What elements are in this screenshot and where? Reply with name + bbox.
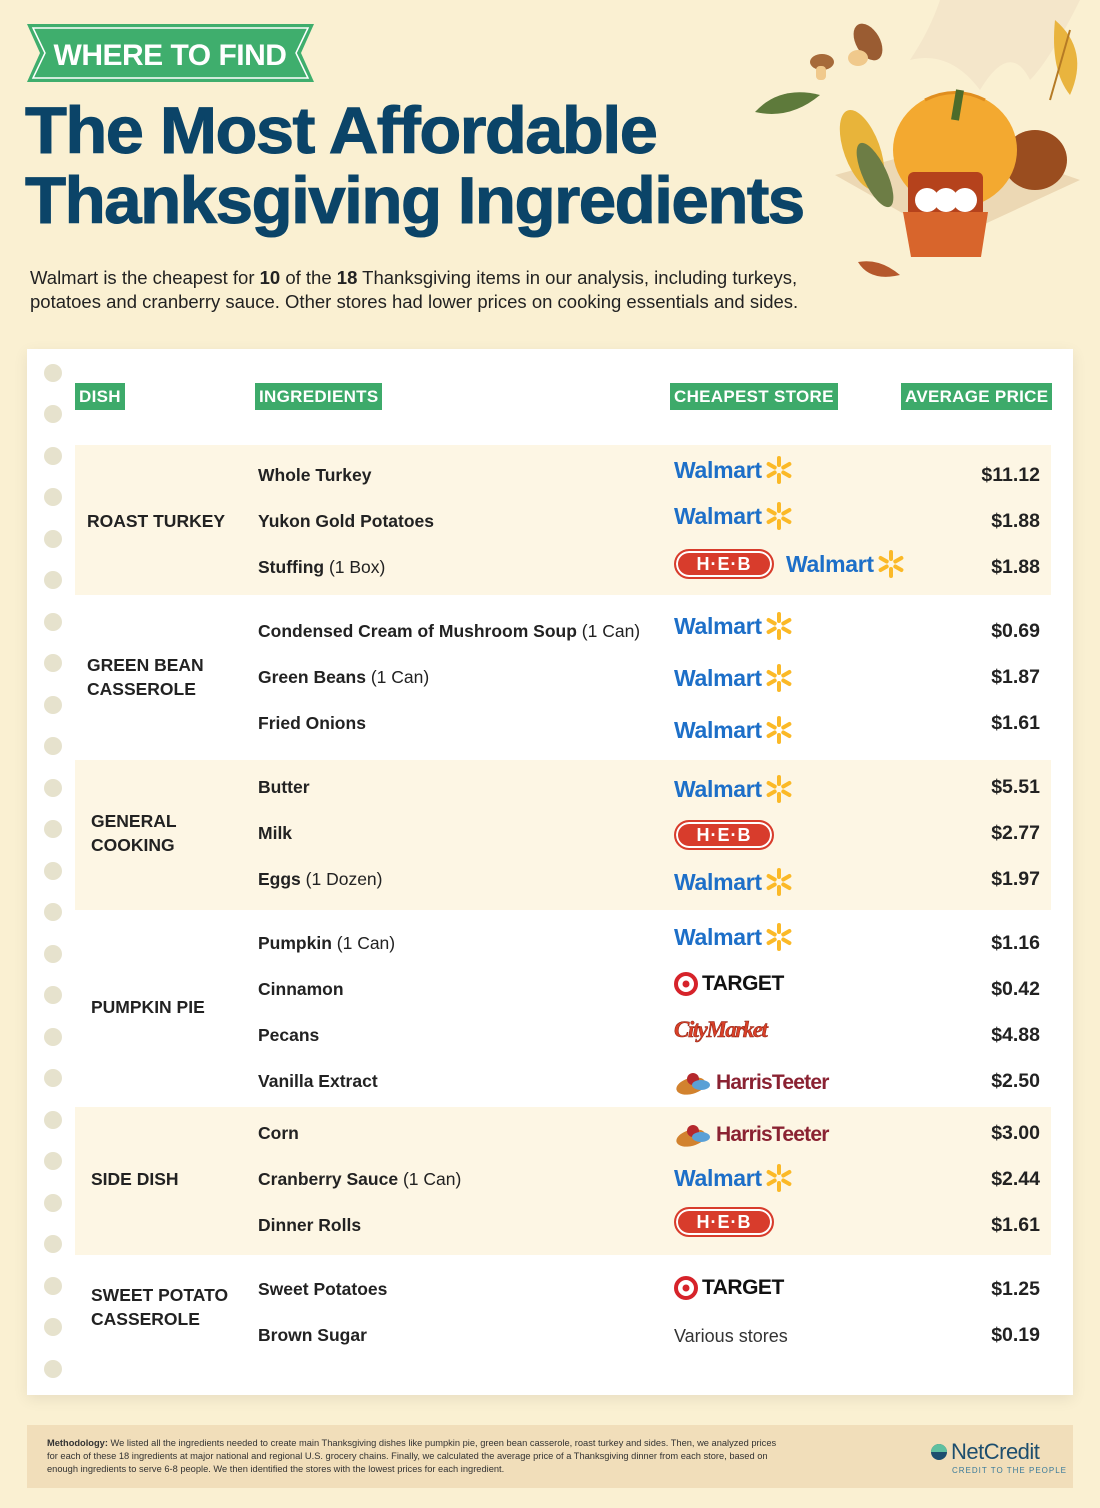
text: $2.50 xyxy=(991,1070,1040,1092)
header: dish: DISH xyxy=(79,387,121,406)
header: cheapest store: CHEAPEST STORE xyxy=(674,387,834,406)
store logos xyxy=(674,456,792,484)
dish: pumpkin pie: PUMPKIN PIE xyxy=(91,997,205,1017)
dish: sweet potato casserole xyxy=(91,1285,228,1329)
illustration: thanksgiving food xyxy=(755,0,1080,277)
text: Walmart xyxy=(674,612,762,638)
dish: sweet potato casserole: CASSEROLE xyxy=(91,1309,200,1329)
text: $1.87 xyxy=(991,666,1040,688)
text: CityMarket xyxy=(674,1017,766,1042)
text: $2.44 xyxy=(991,1168,1040,1190)
text: Dinner Rolls xyxy=(258,1215,361,1235)
text: Pumpkin (1 Can) xyxy=(258,933,395,953)
banner: where to find xyxy=(27,24,314,82)
text: Walmart xyxy=(674,716,762,742)
header: dish xyxy=(75,383,125,410)
text: HarrisTeeter xyxy=(716,1123,829,1146)
text: Walmart xyxy=(674,776,762,802)
header: cheapest store xyxy=(670,383,838,410)
text: Walmart xyxy=(674,924,762,950)
text: TARGET xyxy=(702,972,784,995)
text: Walmart xyxy=(786,550,874,576)
dish: side dish: SIDE DISH xyxy=(91,1169,179,1189)
text: $1.61 xyxy=(991,712,1040,734)
banner: where to find: WHERE TO FIND xyxy=(54,39,286,72)
title: The Most Affordable xyxy=(25,93,656,167)
text: Butter xyxy=(258,777,310,797)
text: Cinnamon xyxy=(258,979,344,999)
text: TARGET xyxy=(702,1276,784,1299)
text: $1.61 xyxy=(991,1214,1040,1236)
title xyxy=(25,93,804,238)
dish: green bean casserole: CASSEROLE xyxy=(87,679,196,699)
text: $0.19 xyxy=(991,1324,1040,1346)
text: $1.97 xyxy=(991,868,1040,890)
ingredients: Whole Turkey xyxy=(258,465,371,485)
text: Walmart xyxy=(674,502,762,528)
intro text: Walmart is the cheapest for 10 of the 18 Thanksgiving items in our analysis, including turkeys, potatoes and cranberry sauce. Other stores had lower prices on cooking essentials and sides. xyxy=(30,267,798,312)
title: Thanksgiving Ingredients xyxy=(25,163,804,237)
text: Yukon Gold Potatoes xyxy=(258,511,434,531)
text: Brown Sugar xyxy=(258,1325,367,1345)
dish: green bean casserole: GREEN BEAN xyxy=(87,655,204,675)
prices: $11.12 xyxy=(981,464,1040,486)
header: ingredients: INGREDIENTS xyxy=(259,387,378,406)
text: $3.00 xyxy=(991,1122,1040,1144)
logo: NetCredit: CREDIT TO THE PEOPLE xyxy=(952,1466,1067,1475)
text: Fried Onions xyxy=(258,713,366,733)
dish: sweet potato casserole: SWEET POTATO xyxy=(91,1285,228,1305)
panel: table card xyxy=(27,349,1073,1395)
text: Walmart xyxy=(674,1164,762,1190)
text: Vanilla Extract xyxy=(258,1071,378,1091)
dish: general cooking: COOKING xyxy=(91,835,175,855)
methodology footer xyxy=(27,1425,1073,1488)
header: average price: AVERAGE PRICE xyxy=(905,387,1048,406)
logo: NetCredit: NetCredit xyxy=(951,1439,1039,1464)
text: Condensed Cream of Mushroom Soup (1 Can) xyxy=(258,621,640,641)
dish: green bean casserole xyxy=(87,655,204,699)
text: Eggs (1 Dozen) xyxy=(258,869,382,889)
header: ingredients xyxy=(255,383,382,410)
text: H·E·B xyxy=(696,825,752,845)
text: Cranberry Sauce (1 Can) xyxy=(258,1169,461,1189)
methodology footer: Methodology: We listed all the ingredients needed to create main Thanksgiving dishes like pumpkin pie, green bean casserole, roast turkey and sides. Then, we analyzed prices for each of these 18 ingredients at major national and regional U.S. grocery chains. Finally, we calculated the average price of a Thanksgiving dinner from each store, based on enough ingredients to serve 6-8 people. We then identified the stores with the lowest prices for each ingredient. xyxy=(47,1438,776,1474)
text: Walmart xyxy=(674,664,762,690)
header: average price xyxy=(901,383,1052,410)
text: Corn xyxy=(258,1123,299,1143)
text: $1.16 xyxy=(991,932,1040,954)
text: Pecans xyxy=(258,1025,319,1045)
dish: general cooking xyxy=(91,811,177,855)
text: H·E·B xyxy=(696,554,752,574)
logo: NetCredit xyxy=(931,1439,1067,1475)
text: $0.42 xyxy=(991,978,1040,1000)
text: $1.88 xyxy=(991,556,1040,578)
text: $2.77 xyxy=(991,822,1040,844)
text: Various stores xyxy=(674,1326,788,1346)
dish: roast turkey: ROAST TURKEY xyxy=(87,511,225,531)
text: $1.25 xyxy=(991,1278,1040,1300)
text: Stuffing (1 Box) xyxy=(258,557,385,577)
text: Sweet Potatoes xyxy=(258,1279,387,1299)
text: $4.88 xyxy=(991,1024,1040,1046)
text: HarrisTeeter xyxy=(716,1071,829,1094)
text: Walmart xyxy=(674,868,762,894)
text: $0.69 xyxy=(991,620,1040,642)
text: H·E·B xyxy=(696,1212,752,1232)
text: Milk xyxy=(258,823,292,843)
text: $5.51 xyxy=(991,776,1040,798)
text: Green Beans (1 Can) xyxy=(258,667,429,687)
dish: general cooking: GENERAL xyxy=(91,811,177,831)
text: $1.88 xyxy=(991,510,1040,532)
store logos: Walmart xyxy=(674,456,762,482)
